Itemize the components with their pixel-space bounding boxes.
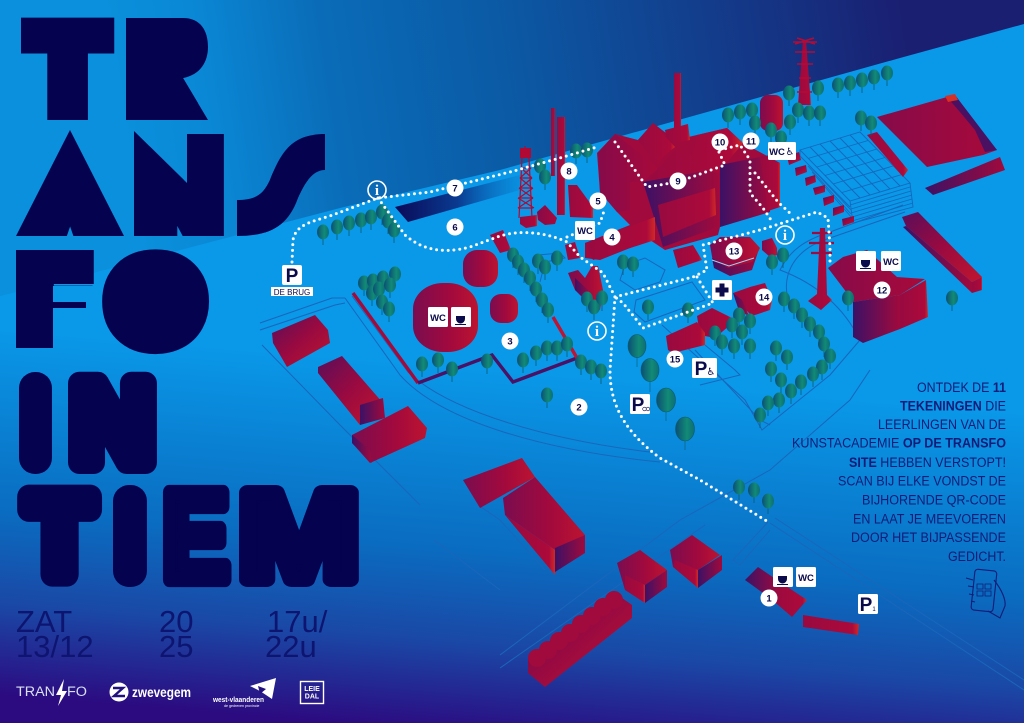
call to action text: GEDICHT. (948, 549, 1006, 564)
call to action text (792, 380, 1006, 564)
date and time: 17u/ (267, 604, 328, 639)
logo Leiedal (300, 682, 324, 704)
date and time: 13/12 (16, 629, 94, 664)
parking bikes: P (632, 395, 645, 416)
long dark strip between path 7 and 6 (395, 175, 520, 222)
perimeter wall (353, 293, 577, 383)
title TRANSFO: S (232, 103, 332, 266)
parking disabled (692, 358, 717, 380)
parking P1: P (860, 595, 873, 616)
title TIEM: T (28, 474, 92, 599)
logo Leiedal: LEIE (304, 686, 320, 693)
sky band behind the site (0, 0, 1024, 296)
call to action text: EN LAAT JE MEEVOEREN (853, 512, 1006, 526)
number markers: 5 (595, 196, 601, 208)
number markers: 15 (670, 354, 681, 366)
info markers (368, 181, 794, 340)
building 13 octagon (710, 237, 760, 276)
number markers: 13 (729, 246, 739, 258)
large trees (628, 334, 694, 450)
call to action text: SITE HEBBEN VERSTOPT! (849, 455, 1006, 470)
call to action text: SCAN BIJ ELKE VONDST DE (838, 474, 1006, 488)
walking route dotted paths (292, 142, 830, 523)
WC labels: WC (798, 573, 814, 584)
buildings left (272, 315, 427, 463)
title TIEM: I (118, 477, 142, 596)
title TRANSFO: R (132, 9, 201, 125)
parking P1 (858, 594, 878, 616)
call to action text: LEERLINGEN VAN DE (878, 417, 1006, 432)
number markers: 12 (877, 286, 887, 296)
title IN (19, 372, 157, 474)
coffee labels (451, 251, 876, 587)
building: big hall top right (867, 94, 1005, 195)
grid structure (800, 132, 913, 223)
icon: hand with phone and QR code (966, 569, 1005, 618)
number markers: 6 (452, 222, 458, 234)
number markers: 14 (759, 292, 770, 304)
trees (317, 66, 958, 514)
logo Transfo (16, 679, 87, 706)
logo Zwevegem: zwevegem (132, 685, 191, 700)
number markers: 9 (675, 176, 681, 188)
number markers: 2 (576, 402, 582, 414)
parking P De Brug (271, 265, 313, 297)
parking bikes (630, 394, 650, 416)
WC labels: WC (883, 257, 899, 268)
title TIEM: E (162, 467, 229, 607)
row houses (528, 591, 632, 687)
title TIEM: M (238, 465, 360, 606)
title TRANSFO: N (142, 125, 216, 244)
number markers: 11 (746, 136, 757, 148)
logo West-Vlaanderen: west-vlaanderen (212, 697, 264, 704)
tanks (413, 250, 518, 352)
double building by info (568, 266, 603, 310)
logo Transfo: FO (67, 684, 87, 699)
water tank top (760, 95, 783, 131)
title IN: N (72, 360, 153, 488)
WC labels (428, 142, 901, 587)
logo West-Vlaanderen: de gedreven provincie (224, 704, 259, 708)
date and time: 20 (159, 604, 193, 639)
call to action text: BIJHORENDE QR-CODE (862, 492, 1006, 508)
title TRANSFO: F (20, 238, 87, 361)
info markers: i (595, 324, 599, 340)
road network (260, 205, 1024, 690)
logo Transfo: TRAN (16, 684, 55, 699)
WC labels: WC (577, 226, 593, 237)
WC labels: WC (430, 313, 446, 324)
small sheds near paths (490, 230, 580, 260)
factory complex (537, 73, 780, 268)
title TRANSFO: O (119, 250, 192, 352)
lattice tower left (518, 146, 537, 228)
first aid marker (712, 280, 732, 300)
parking P De Brug: DE BRUG (274, 288, 310, 297)
small building beside 13 (762, 238, 777, 257)
chimneys (551, 108, 565, 215)
parking P De Brug: P (286, 266, 299, 287)
date and time: 22u (265, 629, 317, 664)
title TIEM (17, 484, 359, 588)
date and time (16, 604, 328, 664)
title IN: I (24, 364, 47, 484)
small red sheds along the grid (787, 152, 854, 226)
logo Zwevegem (110, 682, 191, 702)
WC labels: ♿ (786, 147, 794, 158)
building 12 (828, 250, 928, 343)
call to action text: DOOR HET BIJPASSENDE (851, 530, 1006, 545)
parking P1: 1 (872, 607, 876, 613)
call to action text: TEKENINGEN DIE (900, 398, 1006, 414)
title TRANSFO: A (36, 130, 104, 235)
number markers: 8 (566, 166, 572, 178)
building 14 (733, 283, 772, 316)
call to action text: KUNSTACADEMIE OP DE TRANSFO (792, 436, 1006, 450)
WC labels: WC (769, 147, 785, 158)
number markers: 3 (507, 336, 513, 348)
logo Leiedal: DAL (305, 694, 320, 700)
number markers: 1 (766, 594, 772, 604)
info markers: i (783, 228, 787, 244)
title TRANSFO: T (32, 4, 104, 133)
date and time: ZAT (16, 604, 72, 639)
date and time: 25 (159, 629, 193, 664)
number markers (446, 132, 890, 606)
building 15 (666, 308, 732, 353)
parking disabled: P (695, 359, 708, 380)
info markers: i (375, 183, 379, 199)
pylon right (808, 228, 834, 310)
number markers: 10 (715, 138, 725, 148)
buildings bottom (463, 458, 859, 635)
parking disabled: ♿ (707, 367, 715, 378)
logo West-Vlaanderen (212, 678, 276, 708)
call to action text: ONTDEK DE 11 (917, 380, 1006, 395)
number markers: 7 (452, 184, 458, 194)
pylon top (793, 38, 817, 105)
title TRANSFO (20, 4, 332, 361)
building: long right block (902, 212, 982, 293)
number markers: 4 (609, 232, 615, 244)
